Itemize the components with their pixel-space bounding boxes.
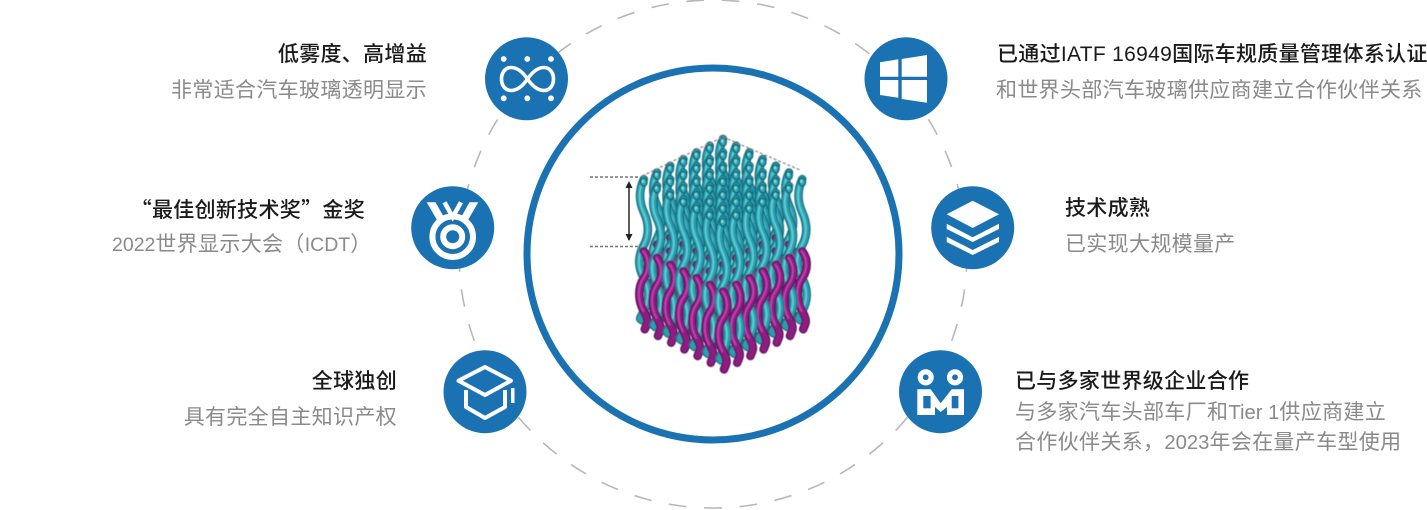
heading: partners: 已与多家世界级企业合作 xyxy=(1015,370,1249,393)
icon: infinity xyxy=(485,37,568,120)
pitch measurement arrow xyxy=(590,177,640,246)
heading: award: “最佳创新技术奖”金奖 xyxy=(131,194,365,224)
icon: layers xyxy=(931,186,1014,269)
item: low haze xyxy=(171,42,427,102)
large blue circle xyxy=(527,68,899,440)
text: mature technology detail: 已实现大规模量产 xyxy=(1065,233,1236,256)
heading: certification: 已通过IATF 16949国际车规质量管理体系认证 xyxy=(997,43,1427,66)
item: unique xyxy=(184,370,397,429)
heading: mature technology: 技术成熟 xyxy=(1065,197,1150,220)
icon: windows logo xyxy=(864,37,948,120)
text: low haze detail: 非常适合汽车玻璃透明显示 xyxy=(171,79,427,102)
item: mature technology xyxy=(1065,196,1236,256)
item: certification xyxy=(996,42,1427,102)
icon: medal xyxy=(411,186,494,269)
icon: graduation cap xyxy=(444,350,526,433)
icon: partnership figures xyxy=(899,350,982,433)
text: partners detail line two: 合作伙伴关系，2023年会在量产车型使用 xyxy=(1015,431,1401,454)
text: partners detail line one: 与多家汽车头部车厂和Tier 1供应商建立 xyxy=(1015,401,1386,424)
heading: unique: 全球独创 xyxy=(312,370,397,393)
item: award xyxy=(112,194,372,256)
text: unique detail: 具有完全自主知识产权 xyxy=(184,406,397,429)
text: certification detail: 和世界头部汽车玻璃供应商建立合作伙伴关系 xyxy=(996,79,1423,102)
heading: low haze: 低雾度、高增益 xyxy=(278,43,427,66)
helical structure cube xyxy=(639,137,807,369)
dashed orbit ring xyxy=(459,0,967,508)
text: award detail: 2022世界显示大会（ICDT） xyxy=(112,233,372,256)
item: partners xyxy=(1015,370,1401,454)
